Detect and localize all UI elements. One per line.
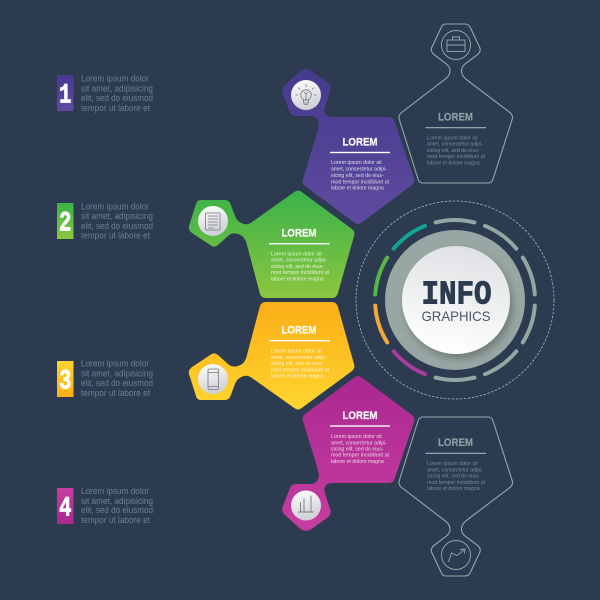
green heading: LOREM xyxy=(282,228,316,240)
green text: Lorem ipsum dolor sit xyxy=(271,251,322,257)
magenta heading: LOREM xyxy=(342,410,378,422)
step 3 legend xyxy=(57,358,153,398)
yellow text: mod tempor incididunt ut xyxy=(271,367,329,373)
top outline text: sicing elit, sed do eius- xyxy=(427,148,480,154)
bottom outline heading: LOREM xyxy=(438,437,473,449)
purple text: Lorem ipsum dolor sit xyxy=(331,160,382,166)
magenta text: labore et dolore magna xyxy=(331,459,385,465)
bottom outline text: sicing elit, sed do eius- xyxy=(427,474,480,480)
purple text: amet, consectetur adipi- xyxy=(331,166,387,172)
ring segments xyxy=(375,220,535,380)
grey ring xyxy=(385,230,525,370)
legend text 3: elit, sed do eiusmod xyxy=(81,378,153,388)
yellow text: amet, consectetur adipi- xyxy=(271,355,327,361)
legend text 3 xyxy=(81,358,153,398)
purple pentagon shape xyxy=(282,69,414,224)
badge 3: 3 xyxy=(59,366,72,398)
icon: phone xyxy=(198,364,228,394)
legend text 2: sit amet, adipisicing xyxy=(81,211,153,221)
top outline text xyxy=(427,135,485,166)
icon: light bulb xyxy=(291,80,321,110)
legend text 1: Lorem ipsum dolor xyxy=(81,74,149,84)
top outline text: mod tempor incididunt ut xyxy=(427,154,485,160)
dashed outer circle xyxy=(356,201,554,399)
badge 1: 1 xyxy=(59,80,72,112)
bottom outline text: mod tempor incididunt ut xyxy=(427,480,485,486)
green text: labore et dolore magna xyxy=(271,276,325,282)
bottom outline text xyxy=(427,461,485,492)
step 1 legend xyxy=(57,74,153,113)
panel: purple step xyxy=(282,69,414,224)
hub title: GRAPHICS xyxy=(422,308,490,324)
legend text 2 xyxy=(81,202,153,240)
legend text 2: tempor ut labore et xyxy=(81,230,150,240)
central infographic hub xyxy=(356,201,554,399)
purple divider xyxy=(330,152,390,153)
top outline text: labore et dolore magna xyxy=(427,160,481,166)
green text: mod tempor incididunt ut xyxy=(271,270,329,276)
yellow text: sicing elit, sed do eius- xyxy=(271,361,324,367)
badge 2: 2 xyxy=(59,208,72,240)
green pentagon shape xyxy=(189,190,354,298)
magenta text: Lorem ipsum dolor sit xyxy=(331,434,382,440)
legend text 4: tempor ut labore et xyxy=(81,515,150,525)
yellow text xyxy=(271,349,329,380)
step 4 legend xyxy=(57,486,153,525)
legend text 1: sit amet, adipisicing xyxy=(81,84,153,94)
purple text: sicing elit, sed do eius- xyxy=(331,173,384,179)
legend text 2: elit, sed do eiusmod xyxy=(81,221,153,231)
legend text 1: elit, sed do eiusmod xyxy=(81,93,153,103)
bottom outline text: labore et dolore magna xyxy=(427,486,481,492)
legend text 3: Lorem ipsum dolor xyxy=(81,358,149,368)
green text xyxy=(271,251,329,282)
panel: top outline step xyxy=(399,24,512,183)
purple text: labore et dolore magna xyxy=(331,186,385,192)
icon: bar chart xyxy=(291,490,321,520)
legend text 2: Lorem ipsum dolor xyxy=(81,202,149,212)
step 2 legend xyxy=(57,202,153,240)
magenta text: mod tempor incididunt ut xyxy=(331,453,389,459)
magenta divider xyxy=(330,425,390,427)
purple heading: LOREM xyxy=(342,136,378,148)
magenta pentagon shape xyxy=(282,376,414,531)
bottom outline text: amet, consectetur adipi- xyxy=(427,467,483,473)
icon: briefcase xyxy=(442,30,470,60)
magenta text xyxy=(331,434,389,465)
green text: sicing elit, sed do eius- xyxy=(271,264,324,270)
panel: bottom outline step xyxy=(399,417,512,576)
top outline divider xyxy=(426,127,486,128)
bottom outline text: Lorem ipsum dolor sit xyxy=(427,461,478,467)
panel: green step xyxy=(189,190,354,298)
bottom outline shape xyxy=(399,417,512,576)
top outline shape xyxy=(399,24,512,183)
legend text 1 xyxy=(81,74,153,113)
icon: trend line xyxy=(442,540,470,570)
icon: document xyxy=(198,206,228,236)
yellow text: labore et dolore magna xyxy=(271,374,325,380)
legend text 3: sit amet, adipisicing xyxy=(81,368,153,378)
green text: amet, consectetur adipi- xyxy=(271,258,327,264)
green divider xyxy=(269,243,330,244)
panel: magenta step xyxy=(282,376,414,531)
yellow heading: LOREM xyxy=(282,324,316,336)
legend text 3: tempor ut labore et xyxy=(81,388,150,398)
top outline text: amet, consectetur adipi- xyxy=(427,142,483,148)
legend text 4: Lorem ipsum dolor xyxy=(81,486,149,496)
legend text 4 xyxy=(81,486,153,525)
magenta text: amet, consectetur adipi- xyxy=(331,440,387,446)
top outline heading: LOREM xyxy=(438,112,473,124)
yellow divider xyxy=(269,340,330,341)
legend text 1: tempor ut labore et xyxy=(81,103,150,113)
legend text 4: sit amet, adipisicing xyxy=(81,496,153,506)
panel: yellow step xyxy=(189,302,354,410)
yellow pentagon shape xyxy=(189,302,354,410)
white inner circle xyxy=(402,246,510,354)
bottom outline divider xyxy=(426,453,486,454)
purple text: mod tempor incididunt ut xyxy=(331,179,389,185)
hub title: INFO xyxy=(422,276,492,314)
magenta text: sicing elit, sed do eius- xyxy=(331,446,384,452)
top outline text: Lorem ipsum dolor sit xyxy=(427,135,478,141)
purple text xyxy=(331,160,389,192)
legend text 4: elit, sed do eiusmod xyxy=(81,505,153,515)
badge 4: 4 xyxy=(59,494,72,524)
yellow text: Lorem ipsum dolor sit xyxy=(271,349,322,355)
